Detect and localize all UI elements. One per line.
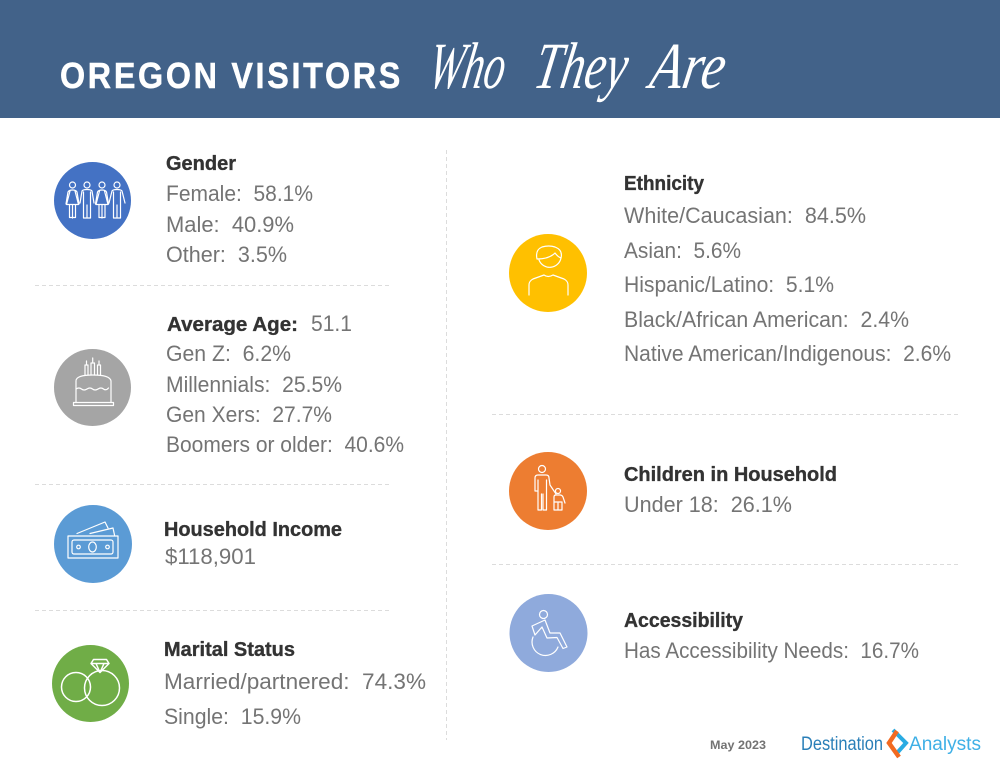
title: Who They Are: Who xyxy=(423,30,512,103)
text: ethnicity: Asian: 5.6% xyxy=(624,238,741,263)
icon: wheelchair user xyxy=(510,594,588,672)
text: children in household xyxy=(624,464,837,517)
text: marital status: Single: 15.9% xyxy=(164,704,301,729)
icon: gender group xyxy=(54,162,131,239)
text: ethnicity: White/Caucasian: 84.5% xyxy=(624,203,866,228)
text: average age: Boomers or older: 40.6% xyxy=(166,432,404,457)
text: accessibility: Has Accessibility Needs: 16.7% xyxy=(624,638,919,663)
text: gender: Female: 58.1% xyxy=(166,181,313,206)
text: ethnicity xyxy=(624,173,951,366)
text: ethnicity: Native American/Indigenous: 2.6% xyxy=(624,341,951,366)
text: average age: Average Age: xyxy=(167,314,298,336)
text: household income: $118,901 xyxy=(165,544,256,569)
text: ethnicity: Ethnicity xyxy=(624,173,705,195)
text: average age xyxy=(166,311,404,457)
text: average age: Millennials: 25.5% xyxy=(166,372,342,397)
icon: parent and child xyxy=(509,452,587,530)
text: average age: 51.1 xyxy=(311,311,352,336)
text: accessibility: Accessibility xyxy=(624,610,744,632)
icon: birthday cake xyxy=(54,349,131,426)
text: average age: Gen Xers: 27.7% xyxy=(166,402,332,427)
title: Who They Are: They xyxy=(529,30,634,103)
text: marital status: Married/partnered: 74.3% xyxy=(164,669,426,694)
text: average age: Gen Z: 6.2% xyxy=(166,341,291,366)
icon: wedding rings xyxy=(52,645,129,722)
text: marital status: Marital Status xyxy=(164,639,295,661)
logo: Destination Analysts xyxy=(801,730,981,757)
text: gender: Gender xyxy=(166,153,236,175)
text: household income xyxy=(164,519,342,569)
text: gender: Other: 3.5% xyxy=(166,242,287,267)
text: gender xyxy=(166,153,313,267)
text: accessibility xyxy=(624,610,919,663)
text: ethnicity: Black/African American: 2.4% xyxy=(624,307,909,332)
text: children in household: Children in Household xyxy=(624,464,837,486)
text: marital status xyxy=(164,639,426,729)
title: Who They Are xyxy=(423,30,732,103)
text: gender: Male: 40.9% xyxy=(166,212,294,237)
date: May 2023 xyxy=(710,740,766,752)
text: children in household: Under 18: 26.1% xyxy=(624,492,792,517)
text: ethnicity: Hispanic/Latino: 5.1% xyxy=(624,272,834,297)
icon: person xyxy=(509,234,587,312)
header banner xyxy=(0,0,1000,118)
icon: money bills xyxy=(54,505,132,583)
text: household income: Household Income xyxy=(164,519,342,541)
logo: Destination Analysts: Destination xyxy=(801,734,883,755)
title: Oregon Visitors: OREGON VISITORS xyxy=(60,55,403,96)
logo: Destination Analysts: Analysts xyxy=(909,734,981,755)
title: Who They Are: Are xyxy=(642,30,732,103)
